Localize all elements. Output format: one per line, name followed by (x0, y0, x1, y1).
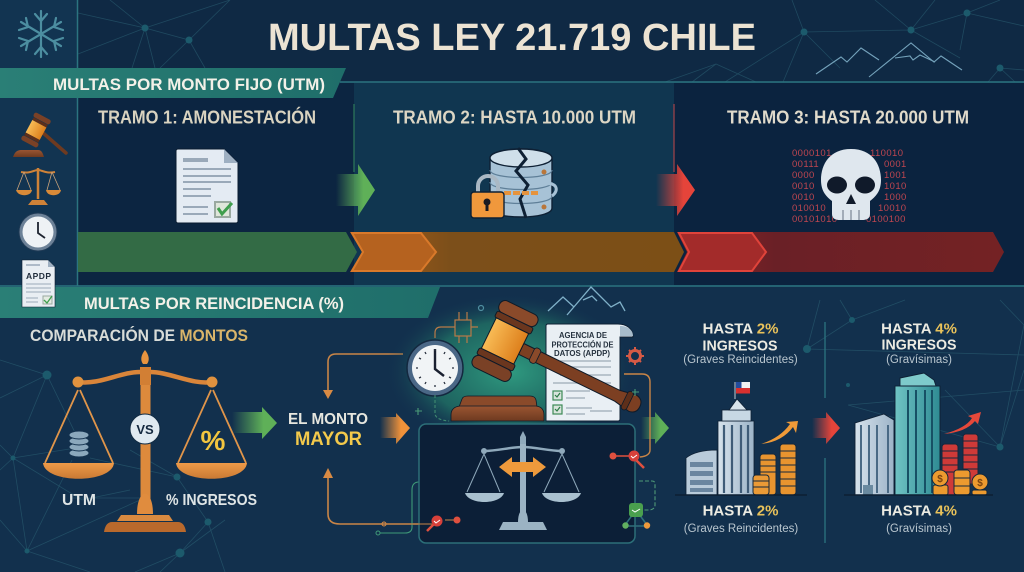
text: el monto mayor (288, 411, 368, 450)
panel: tramo 1 (78, 83, 354, 285)
bar segment: red (677, 232, 1004, 272)
text: hasta 4% ingresos (881, 320, 957, 366)
circuit right (415, 374, 655, 510)
binary code: 1000 (884, 192, 907, 203)
icon: gavel small (13, 112, 66, 157)
icon: red node left (384, 516, 460, 531)
arrow: agency to percentages (641, 412, 669, 444)
decorative circuit chip (435, 306, 484, 343)
divider tramo 2-3 (673, 104, 675, 172)
icon: clock small (19, 213, 57, 251)
lower section network (0, 300, 1024, 572)
icon: apdp document: AGENCIA DE (559, 331, 607, 340)
arrow: 2% to 4% (812, 412, 840, 444)
orange loop top (323, 354, 403, 399)
label: % ingresos: % INGRESOS (166, 492, 257, 509)
icon: large balance scale (43, 350, 247, 532)
binary code: 0000101 (792, 148, 832, 159)
icon: mountains lower (548, 287, 625, 315)
icon: green node (622, 503, 650, 529)
bar segment: orange (350, 232, 684, 272)
red coin stacks (942, 434, 978, 495)
icon: city with orange coins (675, 382, 807, 495)
banner: multas por reincidencia: MULTAS POR REINCIDENCIA (%) (84, 295, 344, 313)
left column rule (76, 0, 78, 286)
double arrow (499, 457, 546, 477)
coin stacks (753, 444, 796, 495)
icon: document (176, 149, 238, 223)
binary code (792, 148, 907, 225)
teal glow (385, 294, 635, 450)
progress bar (78, 232, 1004, 272)
icon: broken database with lock (471, 148, 556, 218)
divider tramo 1-2 (353, 104, 355, 172)
icon: apdp document small (22, 260, 55, 307)
icon: city with red coins: $ (937, 474, 943, 485)
text: hasta 4% ingresos: INGRESOS (882, 336, 956, 354)
icon: apdp document small: APDP (26, 271, 51, 281)
banner: multas por monto fijo: MULTAS POR MONTO FIJO (UTM) (53, 76, 325, 94)
binary code: 0100100 (866, 214, 906, 225)
icon: skull with binary (792, 148, 907, 225)
text: hasta 2% ingresos: (Graves Reincidentes) (683, 354, 798, 366)
icon: city with red coins: $ (977, 478, 983, 489)
binary code: 1001 (884, 170, 907, 181)
icon: clock large (407, 340, 463, 396)
icon: snowflake (19, 11, 63, 57)
text: hasta 4% ingresos: HASTA 4% (881, 320, 957, 338)
binary code: 0000 (792, 170, 815, 181)
arrow: monto mayor to agency (380, 413, 410, 444)
icon: city with red coins (844, 373, 993, 495)
small building (686, 399, 754, 495)
binary code: 10010 (878, 203, 906, 214)
panel: tramo 2 (354, 83, 674, 285)
binary code: 010010 (792, 203, 826, 214)
banner: multas por monto fijo (0, 68, 346, 98)
section rule lower (0, 285, 1024, 287)
icon: apdp document: PROTECCIÓN DE (552, 340, 614, 350)
text: hasta 2% ingresos (683, 320, 798, 366)
text: hasta 4% gravisimas: (Gravísimas) (886, 523, 952, 535)
section rule (340, 81, 1024, 83)
binary code: 0001 (884, 159, 907, 170)
flag chile (736, 382, 750, 394)
text: hasta 4% gravisimas (881, 502, 957, 535)
arrow: tramo 2 to 3 (656, 164, 695, 216)
label: utm: UTM (62, 492, 96, 509)
text: hasta 2% graves: (Graves Reincidentes) (684, 523, 798, 535)
icon: mountains header (816, 43, 962, 77)
text: hasta 2% ingresos: HASTA 2% (703, 320, 778, 338)
icon: coin stack database (69, 431, 89, 457)
teal tower (895, 386, 940, 495)
gold coins (932, 470, 988, 495)
icon: scale in box (465, 431, 581, 530)
percent sign: % (201, 425, 226, 456)
heading: comparacion de montos: COMPARACIÓN DE MONTOS (30, 326, 248, 345)
binary code: 1010 (884, 181, 907, 192)
light building (855, 373, 940, 495)
heading: tramo 3: TRAMO 3: HASTA 20.000 UTM (727, 108, 969, 128)
binary code: 110010 (870, 148, 903, 159)
bar segment: green (78, 232, 357, 272)
panel: tramo 3 (674, 83, 1024, 285)
text: hasta 2% graves: HASTA 2% (703, 502, 778, 520)
red growth arrow (944, 412, 981, 434)
heading: tramo 1: TRAMO 1: AMONESTACIÓN (98, 106, 316, 128)
chevron: red (679, 233, 766, 271)
orange growth arrow (761, 421, 798, 444)
chevron: orange (352, 233, 436, 271)
arrow: compare to monto mayor (232, 407, 277, 439)
gavel base (451, 396, 544, 421)
text: hasta 4% gravisimas: HASTA 4% (881, 502, 957, 520)
header band (0, 0, 1024, 286)
orange loop bottom (323, 468, 428, 535)
icon: red node right (610, 450, 644, 468)
text: el monto mayor: MAYOR (295, 429, 362, 450)
binary code: 00111 (792, 159, 819, 170)
arrow: tramo 1 to 2 (336, 164, 375, 216)
heading: tramo 2: TRAMO 2: HASTA 10.000 UTM (393, 108, 636, 128)
panel: dark scale box (419, 424, 635, 543)
text: hasta 4% ingresos: (Gravísimas) (886, 354, 952, 366)
banner: multas por reincidencia (0, 287, 440, 318)
icon: apdp document (546, 324, 633, 421)
icon: apdp document: DATOS (APDP) (554, 349, 610, 358)
divider percentages (824, 322, 826, 543)
binary code: 00101010 (792, 214, 837, 225)
icon: gear (626, 347, 644, 365)
text: hasta 2% ingresos: INGRESOS (702, 338, 778, 354)
icon: scales small (16, 168, 61, 205)
vs badge: VS (136, 422, 154, 437)
icon: gavel large (470, 299, 656, 440)
binary code: 0010 (792, 181, 815, 192)
binary code: 0010 (792, 192, 815, 203)
text: el monto mayor: EL MONTO (288, 411, 368, 428)
vs badge (130, 414, 160, 444)
title: MULTAS LEY 21.719 CHILE (268, 17, 756, 59)
text: hasta 2% graves (684, 502, 798, 535)
